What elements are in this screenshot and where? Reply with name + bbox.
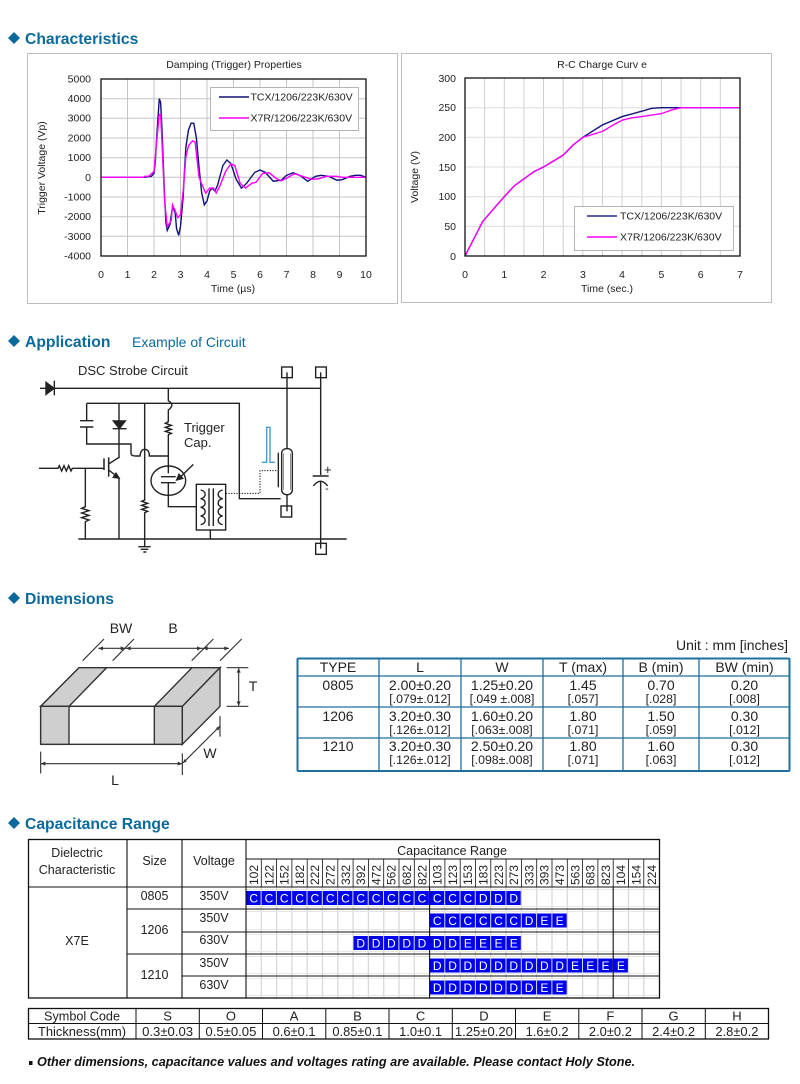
light grid: [246, 887, 659, 998]
row bars: 1206 350V: [430, 914, 567, 928]
x axis labels: R-C: 6: [698, 269, 704, 281]
x axis labels: R-C: 7: [737, 269, 743, 281]
thickness row: 1.25±0.20: [455, 1024, 513, 1039]
thickness row: 0.6±0.1: [273, 1024, 316, 1039]
table header: T (max): [559, 659, 607, 675]
thickness row: Thickness(mm): [38, 1024, 126, 1039]
thickness row: 2.0±0.2: [589, 1024, 632, 1039]
row 1210: [.098±.008]: [471, 753, 533, 767]
row bars: 1210 630V: D: [464, 981, 473, 995]
row bars: 0805 350V: C: [372, 892, 381, 906]
legend: R-C: [574, 206, 734, 250]
x axis labels: damping: 9: [337, 269, 343, 281]
row bars: 0805 350V: C: [249, 892, 258, 906]
x axis labels: R-C: 1: [501, 269, 507, 281]
capacitance codes: 563: [568, 865, 582, 885]
y axis labels: R-C: 50: [444, 221, 456, 233]
legend: damping: [210, 88, 358, 130]
row 1206: [.071]: [568, 723, 598, 737]
x axis labels: R-C: [462, 269, 743, 281]
row bars: 1206 350V: C: [509, 914, 518, 928]
capacitor polarity: +: [324, 462, 332, 477]
label W: W: [203, 745, 217, 761]
x axis labels: damping: 3: [178, 269, 184, 281]
trigger cap label: Cap.: [184, 435, 211, 450]
capacitance codes: 102: [247, 865, 261, 885]
row 0805: [.028]: [646, 692, 676, 706]
table header: L: [416, 659, 424, 675]
capacitor polarity: -: [325, 483, 329, 495]
row 1206: [.063±.008]: [471, 723, 533, 737]
y axis title: damping: Trigger Voltage (Vp): [36, 121, 48, 215]
symbol row: [44, 1008, 742, 1024]
row bars: 1210 630V: [430, 981, 567, 995]
trigger cap label: Trigger: [184, 420, 225, 435]
capacitance codes: 122: [262, 865, 276, 885]
y axis labels: R-C: 0: [450, 251, 456, 263]
column headers: Characteristic: [39, 863, 115, 877]
row bars: 1206 630V: D: [356, 936, 365, 950]
y axis title: R-C: Voltage (V): [409, 151, 421, 203]
capacitance codes: 152: [278, 865, 292, 885]
row bars: 0805 350V: C: [341, 892, 350, 906]
capacitance codes: 154: [630, 865, 644, 885]
row 1210: 1210: [322, 738, 354, 754]
row bars: 1210 350V: E: [602, 959, 610, 973]
x axis labels: R-C: 0: [462, 269, 468, 281]
x axis labels: damping: 0: [98, 269, 104, 281]
curve: TCX damping: [101, 99, 366, 235]
capacitance codes: 473: [553, 865, 567, 885]
capacitance codes: 562: [385, 865, 399, 885]
y axis labels: damping: -1000: [64, 192, 91, 204]
legend: R-C: X7R/1206/223K/630V: [620, 232, 722, 244]
column headers: Capacitance Range: [397, 844, 507, 858]
x axis labels: damping: 5: [231, 269, 237, 281]
capacitance codes: 822: [415, 865, 429, 885]
capacitance codes: 272: [324, 865, 338, 885]
y axis labels: R-C: 250: [438, 102, 456, 114]
row 0805: [.049 ±.008]: [470, 692, 534, 706]
label BW: BW: [110, 620, 133, 636]
row bars: 1210 630V: D: [525, 981, 534, 995]
y axis labels: R-C: [438, 73, 456, 263]
capacitance codes: 823: [599, 865, 613, 885]
row 0805: [.057]: [568, 692, 598, 706]
heading: Dimensions: Dimensions: [25, 591, 114, 608]
row bars: 0805 350V: [246, 892, 521, 906]
table header: [320, 659, 774, 675]
row labels: 350V: [199, 911, 229, 925]
table header: TYPE: [320, 659, 356, 675]
y axis labels: damping: -4000: [64, 250, 91, 262]
row bars: 1206 350V: D: [525, 914, 534, 928]
row 1210: 3.20±0.30: [389, 738, 451, 754]
x axis labels: damping: [98, 269, 372, 281]
capacitance codes: 333: [522, 865, 536, 885]
circuit title: DSC Strobe Circuit: [78, 363, 188, 378]
capacitance codes: 153: [461, 865, 475, 885]
thickness row: [38, 1024, 758, 1039]
row bars: 1206 350V: E: [556, 914, 564, 928]
row bars: 0805 350V: C: [280, 892, 289, 906]
row bars: 1206 630V: E: [510, 936, 518, 950]
symbol row: G: [669, 1008, 679, 1024]
row labels: X7E: [65, 934, 89, 948]
row 1210: 1.60: [647, 738, 675, 754]
row bars: 0805 350V: C: [265, 892, 274, 906]
capacitance codes: 472: [369, 865, 383, 885]
thickness row: 1.6±0.2: [526, 1024, 569, 1039]
footer note: Other dimensions, capacitance values and voltages rating are available. Please contact Holy Stone.: [37, 1055, 635, 1069]
y axis labels: R-C: 300: [438, 73, 456, 85]
row labels: 1206: [141, 923, 168, 937]
row bars: 0805 350V: C: [433, 892, 442, 906]
table header: W: [495, 659, 509, 675]
symbol row: A: [290, 1008, 299, 1024]
capacitance range table: [28, 839, 660, 998]
heading: Application: Example of Circuit: [132, 334, 246, 350]
row 1210: 1.80: [569, 738, 597, 754]
trigger cap label: [184, 420, 225, 450]
column headers: Dielectric: [51, 846, 103, 860]
thickness row: 0.3±0.03: [142, 1024, 193, 1039]
row bars: 1206 630V: D: [448, 936, 457, 950]
y axis labels: damping: 5000: [68, 74, 91, 86]
table header: B (min): [638, 659, 684, 675]
row 1210: 2.50±0.20: [471, 738, 533, 754]
row bars: 1206 630V: D: [433, 936, 442, 950]
row bars: 1206 630V: E: [494, 936, 502, 950]
y axis labels: damping: -2000: [64, 211, 91, 223]
row 1210: [.012]: [729, 753, 760, 767]
dimensions table: [297, 658, 790, 771]
row bars: 1206 350V: E: [540, 914, 548, 928]
symbol row: D: [479, 1008, 489, 1024]
symbol row: E: [543, 1008, 552, 1024]
thickness row: 0.5±0.05: [205, 1024, 256, 1039]
row 0805: [.079±.012]: [389, 692, 451, 706]
symbol row: B: [353, 1008, 362, 1024]
row 0805: [.008]: [729, 692, 760, 706]
symbol row: Symbol Code: [44, 1008, 120, 1024]
column headers: Voltage: [193, 854, 235, 868]
thickness row: 0.85±0.1: [332, 1024, 382, 1039]
heading: Capacitance Range: Capacitance Range: [25, 816, 170, 833]
x axis labels: R-C: 4: [619, 269, 625, 281]
heading: Application: Application: [25, 334, 110, 351]
row bars: 1210 630V: E: [556, 981, 564, 995]
row bars: 1206 630V: D: [372, 936, 381, 950]
row 1206: 1206: [322, 708, 354, 724]
heading: Characteristics: Characteristics: [25, 31, 139, 48]
x axis labels: R-C: 2: [541, 269, 547, 281]
symbol row: F: [606, 1008, 614, 1024]
row 1206: [322, 708, 760, 737]
row labels: 350V: [199, 956, 229, 970]
row bars: 1210 350V: [430, 959, 628, 973]
legend: R-C: TCX/1206/223K/630V: [620, 210, 722, 222]
thickness row: 1.0±0.1: [399, 1024, 442, 1039]
row bars: 1206 630V: D: [387, 936, 396, 950]
row bars: 1210 350V: E: [586, 959, 594, 973]
row bars: 0805 350V: D: [479, 892, 488, 906]
y axis labels: R-C: 100: [438, 191, 456, 203]
curve: TCX charge: [465, 108, 740, 256]
row 1206: 1.60±0.20: [471, 708, 533, 724]
row bars: 0805 350V: D: [509, 892, 518, 906]
capacitance codes: 332: [339, 865, 353, 885]
legend: damping: TCX/1206/223K/630V: [250, 92, 353, 104]
label B: B: [168, 620, 178, 636]
y axis labels: R-C: 150: [438, 162, 456, 174]
row labels: 350V: [199, 889, 229, 903]
row 0805: 0.20: [731, 677, 758, 693]
x axis title: damping: Time (µs): [211, 283, 255, 295]
y axis labels: damping: 2000: [68, 132, 91, 144]
row bars: 1210 630V: D: [509, 981, 518, 995]
capacitance codes: 103: [431, 865, 445, 885]
x axis labels: damping: 1: [125, 269, 131, 281]
row bars: 1210 630V: E: [540, 981, 548, 995]
column headers: Size: [142, 854, 167, 868]
y axis labels: damping: -3000: [64, 231, 91, 243]
y axis labels: damping: 1000: [68, 152, 91, 164]
row bars: 1210 630V: D: [494, 981, 503, 995]
row bars: 1206 630V: D: [402, 936, 411, 950]
row bars: 0805 350V: C: [448, 892, 457, 906]
row 1210: [322, 738, 760, 767]
row bars: 0805 350V: C: [356, 892, 365, 906]
row bars: 1210 350V: D: [540, 959, 549, 973]
row 1206: [.126±.012]: [389, 723, 451, 737]
row bars: 1210 630V: D: [479, 981, 488, 995]
row bars: 0805 350V: C: [464, 892, 473, 906]
row bars: 1206 630V: D: [418, 936, 427, 950]
capacitance codes: [247, 865, 659, 885]
row 1206: 3.20±0.30: [389, 708, 451, 724]
row 0805: 1.45: [569, 677, 597, 693]
row bars: 0805 350V: D: [494, 892, 503, 906]
row bars: 0805 350V: C: [418, 892, 427, 906]
row bars: 1206 350V: C: [464, 914, 473, 928]
capacitance codes: 123: [446, 865, 460, 885]
row bars: 1206 630V: E: [479, 936, 487, 950]
row bars: 0805 350V: C: [326, 892, 335, 906]
curve: X7R damping: [101, 114, 366, 226]
thickness row: 2.8±0.2: [715, 1024, 758, 1039]
row bars: 1210 350V: D: [464, 959, 473, 973]
panel: R-C charge chart: [402, 54, 772, 302]
row bars: 1210 630V: D: [448, 981, 457, 995]
x axis labels: damping: 7: [284, 269, 290, 281]
table header: BW (min): [715, 659, 774, 675]
capacitance codes: 104: [614, 865, 628, 885]
row bars: 1210 350V: D: [448, 959, 457, 973]
row labels: 1210: [141, 968, 168, 982]
row bars: 0805 350V: C: [387, 892, 396, 906]
capacitance codes: 182: [293, 865, 307, 885]
row bars: 0805 350V: C: [402, 892, 411, 906]
row bars: 1210 350V: D: [525, 959, 534, 973]
row bars: 0805 350V: C: [295, 892, 304, 906]
row labels: 630V: [199, 933, 229, 947]
symbol row: O: [226, 1008, 236, 1024]
x axis labels: damping: 4: [204, 269, 210, 281]
row bars: 1206 350V: C: [448, 914, 457, 928]
row 0805: 2.00±0.20: [389, 677, 451, 693]
thickness symbol table: [28, 1008, 769, 1039]
row 0805: [322, 677, 760, 706]
row bars: 1210 350V: D: [494, 959, 503, 973]
circuit diagram: [39, 363, 347, 554]
capacitance codes: 682: [400, 865, 414, 885]
thickness row: 2.4±0.2: [652, 1024, 695, 1039]
y axis labels: damping: 3000: [68, 113, 91, 125]
row 1206: 1.80: [569, 708, 597, 724]
row 1210: 0.30: [731, 738, 758, 754]
row 0805: 0805: [322, 677, 354, 693]
panel: damping chart: [28, 54, 398, 304]
x axis labels: R-C: 3: [580, 269, 586, 281]
row bars: 1210 350V: D: [555, 959, 564, 973]
row bars: 1206 350V: C: [433, 914, 442, 928]
column headers: [39, 844, 507, 877]
row bars: 1210 630V: D: [433, 981, 442, 995]
capacitance codes: 224: [645, 865, 659, 885]
row bars: 1206 350V: C: [479, 914, 488, 928]
row 1210: [.126±.012]: [389, 753, 451, 767]
row 0805: 0.70: [647, 677, 675, 693]
capacitance codes: 392: [354, 865, 368, 885]
row bars: 1210 350V: D: [479, 959, 488, 973]
row 1206: 1.50: [647, 708, 675, 724]
capacitance codes: 683: [584, 865, 598, 885]
y axis labels: R-C: 200: [438, 132, 456, 144]
row 1206: [.059]: [646, 723, 676, 737]
capacitance codes: 183: [476, 865, 490, 885]
row labels: [65, 889, 229, 992]
curve: X7R charge: [465, 108, 740, 256]
chart title: R-C: R-C Charge Curv e: [557, 59, 647, 71]
row bars: 1210 350V: E: [571, 959, 579, 973]
x axis labels: damping: 2: [151, 269, 157, 281]
unit note: Unit : mm [inches]: [676, 637, 788, 653]
x axis labels: damping: 10: [360, 269, 372, 281]
x axis labels: damping: 8: [310, 269, 316, 281]
capacitor polarity: [324, 462, 332, 495]
symbol row: H: [732, 1008, 742, 1024]
row bars: 1206 350V: C: [494, 914, 503, 928]
y axis labels: damping: 0: [85, 172, 91, 184]
x axis title: R-C: Time (sec.): [581, 283, 633, 295]
x axis labels: damping: 6: [257, 269, 263, 281]
row 1210: [.063]: [646, 753, 676, 767]
label T: T: [249, 678, 258, 694]
capacitance codes: 393: [538, 865, 552, 885]
row bars: 1206 630V: E: [464, 936, 472, 950]
capacitance codes: 273: [507, 865, 521, 885]
row labels: 630V: [199, 978, 229, 992]
capacitance codes: 222: [308, 865, 322, 885]
row 1206: 0.30: [731, 708, 758, 724]
row bars: 1210 350V: E: [617, 959, 625, 973]
row bars: 1210 350V: D: [433, 959, 442, 973]
chart title: damping: Damping (Trigger) Properties: [166, 59, 302, 71]
symbol row: S: [163, 1008, 172, 1024]
chip dimension drawing: [41, 620, 258, 788]
legend: damping: X7R/1206/223K/630V: [250, 112, 352, 124]
label L: L: [111, 772, 119, 788]
row bars: 0805 350V: C: [311, 892, 320, 906]
row 1210: [.071]: [568, 753, 598, 767]
y axis labels: damping: 4000: [68, 93, 91, 105]
row 0805: 1.25±0.20: [471, 677, 533, 693]
y axis labels: damping: [64, 74, 91, 262]
row 1206: [.012]: [729, 723, 760, 737]
row labels: 0805: [141, 889, 168, 903]
row bars: 1206 630V: [354, 936, 521, 950]
capacitance codes: 223: [492, 865, 506, 885]
heading: Application: [8, 334, 246, 351]
row bars: 1210 350V: D: [509, 959, 518, 973]
symbol row: C: [416, 1008, 425, 1024]
x axis labels: R-C: 5: [658, 269, 664, 281]
